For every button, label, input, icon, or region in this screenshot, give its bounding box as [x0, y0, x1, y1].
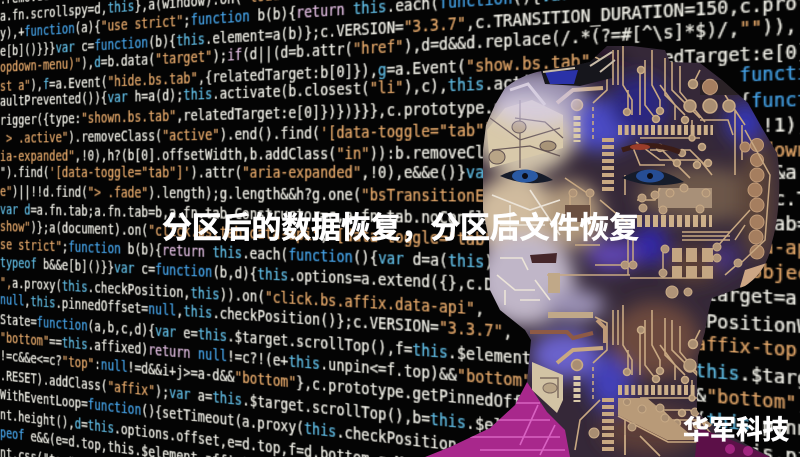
lavender forehead glow — [487, 70, 587, 126]
logo text: 华军科技 — [683, 415, 789, 445]
neck circuit details — [530, 320, 700, 456]
right head pads and ear — [700, 80, 770, 290]
shoulder: magenta clothing — [425, 382, 770, 457]
forehead tan copper area — [487, 84, 563, 168]
figure: circuit-board human head — [425, 46, 780, 457]
neck circuit — [556, 305, 712, 455]
title: 分区后的数据恢复，分区后文件恢复 — [162, 212, 639, 245]
lower face circuit — [492, 178, 750, 318]
eyes — [500, 144, 684, 185]
right chip pin column — [715, 140, 729, 222]
skin and colour glows — [420, 30, 785, 457]
forehead circuit — [557, 45, 745, 195]
hair streak — [540, 52, 615, 86]
